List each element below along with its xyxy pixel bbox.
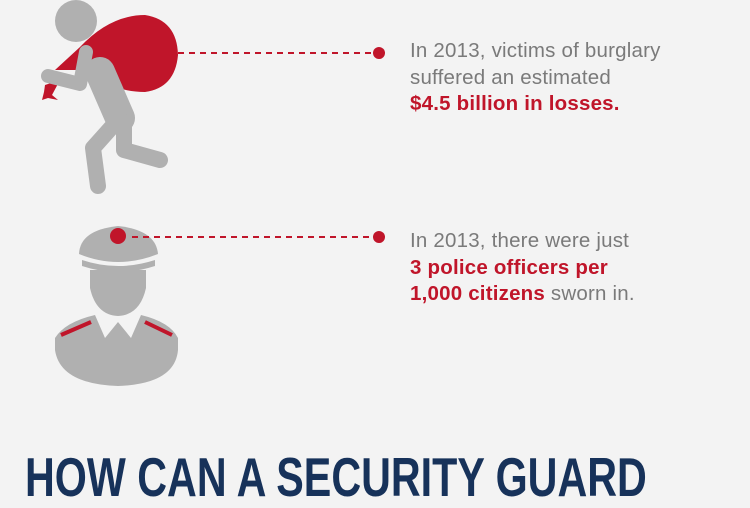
text block: burglary losses: suffered an estimated <box>410 66 611 88</box>
text block: police officers: In 2013, there were just <box>410 229 629 252</box>
text block: police officers <box>410 229 635 305</box>
icon: police officer <box>55 226 385 386</box>
text block: police officers: 1,000 citizens sworn in. <box>410 282 635 305</box>
icon: burglar with sack <box>41 0 385 194</box>
dashed connector 1 <box>178 47 385 59</box>
text block: police officers: 3 police officers per <box>410 256 608 278</box>
text block: burglary losses: $4.5 billion in losses. <box>410 92 620 115</box>
text block: burglary losses: In 2013, victims of burglary <box>410 39 661 62</box>
text block: burglary losses <box>410 39 661 115</box>
dashed connector 2 <box>110 228 385 244</box>
title: HOW CAN A SECURITY GUARD <box>25 446 647 508</box>
